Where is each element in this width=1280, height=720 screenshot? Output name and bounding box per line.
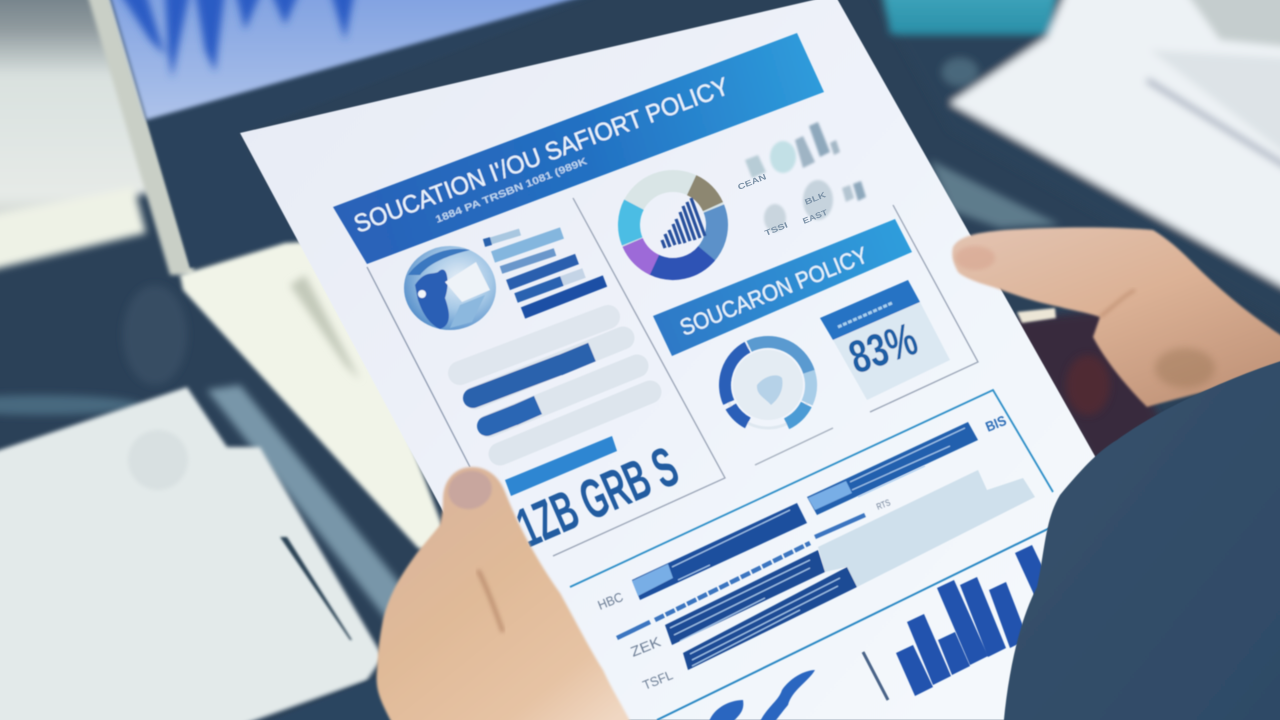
thumbnail xyxy=(444,466,496,514)
shoulder of reader xyxy=(1003,358,1280,720)
middle panel xyxy=(653,205,978,465)
banner: education policy: SOUCARON POLICY xyxy=(676,242,871,341)
thumb crease xyxy=(478,570,503,632)
stat card xyxy=(820,280,950,400)
donut chart top xyxy=(611,163,735,287)
left hand holding sheet xyxy=(377,466,632,720)
bottom table section xyxy=(570,390,1065,720)
left panel xyxy=(367,198,725,559)
world map xyxy=(708,670,815,720)
big figure: 1ZB GRB S xyxy=(508,434,687,559)
pale bars xyxy=(818,470,1035,587)
header subtitle: 1884 PA TRSBN 1081 (989K xyxy=(434,156,590,226)
header banner xyxy=(333,33,824,264)
progress bars xyxy=(460,317,650,454)
row captions: BIS xyxy=(983,412,1009,435)
small legend bars xyxy=(484,232,605,313)
dark table rows xyxy=(632,422,978,670)
tag bar xyxy=(505,436,617,496)
small icon cluster: CEAN xyxy=(736,172,768,192)
row captions: ZEK xyxy=(628,633,664,660)
screen chart streaks xyxy=(118,0,355,78)
small icon cluster: TSSI xyxy=(763,221,789,238)
small icon cluster xyxy=(736,122,866,238)
blue row labels xyxy=(617,515,865,638)
donut inner bars xyxy=(662,198,705,248)
header title: SOUCATION I'/OU SAFIORT POLICY xyxy=(350,72,733,239)
stat card: 83% xyxy=(842,312,924,383)
donut chart middle xyxy=(710,327,826,443)
row captions xyxy=(596,412,1009,693)
laptop xyxy=(83,0,640,560)
bar chart xyxy=(863,545,1065,700)
right hand holding sheet xyxy=(952,227,1280,407)
small icon cluster: EAST xyxy=(801,208,829,226)
report sheet xyxy=(240,0,1100,720)
row captions: RTS xyxy=(875,497,892,512)
stack of papers on desk xyxy=(0,385,405,720)
row captions: TSFL xyxy=(641,667,675,693)
small icon cluster: BLK xyxy=(803,190,827,207)
row captions: HBC xyxy=(596,589,625,613)
globe illustration xyxy=(404,246,496,330)
banner: education policy xyxy=(653,219,912,356)
